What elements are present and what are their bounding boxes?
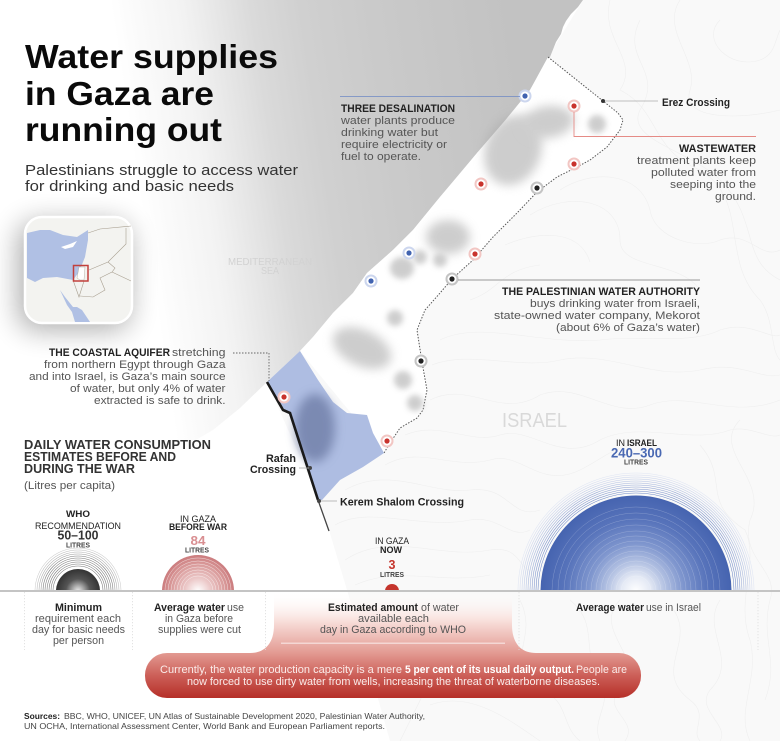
label: in Israel: 240–300 [611,444,662,460]
label: in Israel: ISRAEL [627,438,657,449]
sources: UN OCHA, International Assessment Center, World Bank and European Parliament reports. [24,721,385,731]
label: in Gaza before war: LITRES [185,546,209,554]
callout: three desalination plants [340,96,520,163]
callout: three desalination plants: require electricity or [341,139,447,151]
callout: coastal aquifer: extracted is safe to drink. [94,395,226,407]
subtitle: Palestinians struggle to access water [25,162,298,179]
column text: minimum requirement: Minimum [55,602,102,614]
column text: minimum requirement [32,602,125,647]
inset: Red Sea [60,290,90,322]
marker: wastewater plants (red) [278,100,580,446]
column text: average water use in Gaza: supplies were cut [158,624,241,636]
callout: wastewater: WASTEWATER [679,143,756,155]
column dividers [24,592,758,650]
callout: three desalination plants: water plants produce [340,115,455,127]
callout: coastal aquifer: from northern Egypt through Gaza [44,359,226,371]
border line with Egypt [267,382,318,500]
column text: average water use in Gaza: Average water [154,602,226,614]
label: WHO recommendation: LITRES [66,540,90,550]
callout: Erez Crossing: Erez Crossing [662,97,730,109]
strip outline [300,57,623,453]
column text: average water use in Gaza: use [227,602,244,614]
subtitle [25,162,298,195]
red callout pill: now forced to use dirty water from wells, increasing the threat of waterborne diseases. [187,676,600,688]
label: in Gaza now [375,536,410,579]
label: WHO recommendation [35,509,121,550]
callout: wastewater: treatment plants keep [637,155,756,167]
inset locator map [18,217,132,330]
callout: wastewater: polluted water from [651,167,756,179]
inset: Israel and Palestine [77,267,85,280]
title: running out [25,111,222,148]
label: in Gaza now: IN GAZA [375,536,410,547]
callout: three desalination plants: fuel to operate. [341,151,421,163]
callout: wastewater: seeping into the [670,179,756,191]
label: in Israel: LITRES [624,458,648,466]
label: in Gaza now: 3 [389,558,396,572]
column text: minimum requirement: requirement each [35,613,121,625]
label: in Gaza before war: 84 [190,534,206,548]
label: Mediterranean Sea: SEA [261,266,279,277]
title: in Gaza are [25,75,214,112]
column text: average water use in Israel: use in Israel [646,602,701,614]
heading: daily water consumption [24,437,211,492]
label: in Israel: IN [616,438,625,449]
callout: Palestinian Water Authority: buys drinking water from Israeli, [530,298,700,310]
sources [24,711,425,731]
callout: wastewater: ground. [715,191,756,203]
heading: daily water consumption: DURING THE WAR [24,461,136,476]
callout: Palestinian Water Authority: THE PALESTINIAN WATER AUTHORITY [502,286,701,298]
sea: Mediterranean with gradient and torn edge [0,0,583,510]
column text: estimated amount: of water [421,602,459,614]
label: Mediterranean Sea: MEDITERRANEAN [228,257,312,268]
heading: daily water consumption: DAILY WATER CONSUMPTION [24,437,211,452]
heading: daily water consumption: (Litres per capita) [24,480,115,492]
callout: Rafah Crossing: Rafah [266,453,296,465]
label: in Israel [611,438,662,466]
label: in Gaza now: LITRES [380,570,404,579]
callout: coastal aquifer: THE COASTAL AQUIFER [49,347,170,359]
baseline rule [0,590,780,592]
column text: average water use in Israel [576,602,701,614]
pale divider in red column [281,642,505,644]
inset: sea [27,230,88,282]
chart: Gaza before war circle [162,555,234,590]
callout: Palestinian Water Authority: state-owned water company, Mekorot [494,310,700,322]
marker: water authority points (black) [416,182,542,366]
callout: three desalination plants: THREE DESALINATION [341,103,455,115]
callout: Erez Crossing [601,97,730,109]
label: WHO recommendation: WHO [66,509,90,520]
label: in Gaza now: NOW [380,545,402,556]
label: WHO recommendation: RECOMMENDATION [35,521,121,532]
callout: Palestinian Water Authority: (about 6% of Gaza’s water) [556,322,700,334]
heading: daily water consumption: ESTIMATES BEFORE AND [24,449,176,464]
column text: estimated amount: available each [358,613,429,625]
callout: Rafah Crossing [250,453,312,476]
population density blobs [326,103,606,411]
label: in Gaza before war: BEFORE WAR [169,522,227,533]
sources: Sources: [24,711,60,721]
column text: minimum requirement: per person [53,635,104,647]
callout: three desalination plants: drinking water but [341,127,438,139]
callout: coastal aquifer [29,347,269,407]
label: WHO recommendation: 50–100 [58,528,99,542]
title: Water supplies [25,38,278,75]
column text: minimum requirement: day for basic needs [32,624,125,636]
callout: Kerem Shalom Crossing: Kerem Shalom Crossing [340,496,464,508]
callout: coastal aquifer: and into Israel, is Gaza’s main source [29,371,226,383]
map: Gaza Strip [267,57,623,531]
chart: Gaza now circle [385,584,399,590]
label: in Gaza before war: IN GAZA [180,514,217,525]
callout: coastal aquifer: of water, but only 4% of water [70,383,226,395]
column text: average water use in Israel: Average water [576,602,645,614]
red callout pill: Currently, the water production capacity is a mere [160,664,402,676]
column text: average water use in Gaza [154,602,244,636]
column text: average water use in Gaza: in Gaza before [165,613,233,625]
callout: Rafah Crossing: Crossing [250,464,296,476]
aquifer area [267,351,384,500]
callout: Palestinian Water Authority [458,280,701,334]
column text: estimated amount: day in Gaza according to WHO [320,624,466,636]
column text: estimated amount: Estimated amount [328,602,418,614]
label: in Gaza before war [169,514,227,554]
marker: desalination plants (blue) [366,90,530,286]
inset: Cyprus [61,241,77,249]
inset: red locator box [74,266,88,281]
callout: wastewater [574,112,756,203]
subtitle: for drinking and basic needs [25,178,234,195]
column text: estimated amount [320,602,466,636]
inset: borders [73,226,131,297]
red callout backdrop column [250,592,536,653]
chart: Israel circle [518,472,754,590]
label: Israel: ISRAEL [502,410,567,432]
title [25,38,278,148]
red callout pill [145,653,641,698]
sources: BBC, WHO, UNICEF, UN Atlas of Sustainable Development 2020, Palestinian Water Authority, [64,711,425,721]
land: Israel with contour lines [267,0,780,741]
label: Mediterranean Sea [228,257,312,277]
callout: coastal aquifer: stretching [172,347,226,359]
chart: WHO recommendation circle [34,548,122,590]
red callout pill: 5 per cent of its usual daily output. [405,664,574,676]
red callout pill: People are [576,664,627,676]
